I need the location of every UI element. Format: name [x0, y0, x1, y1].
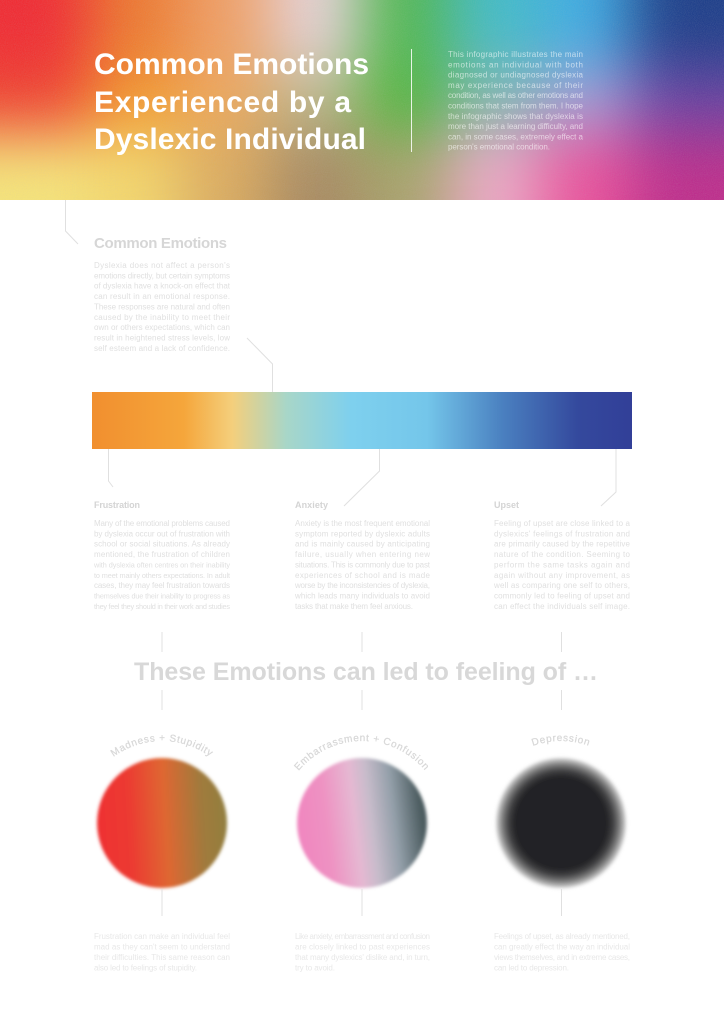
title: Common Emotions	[94, 48, 369, 81]
intro text: own or others expectations, which can	[94, 323, 230, 332]
depression text: Feelings of upset, as already mentioned,	[494, 932, 630, 941]
curved label: madness + stupidity: Madness + Stupidity	[110, 734, 213, 756]
embarrassment text	[295, 932, 430, 972]
curved label: embarrassment + confusion: Embarrassment + Confusion	[294, 734, 428, 770]
header intro text: more than just a learning difficulty, and	[448, 122, 583, 131]
upset text: dyslexics' feelings of frustration and	[494, 529, 630, 538]
anxiety text: situations. This is commonly due to past	[295, 560, 431, 569]
anxiety text: which leads many individuals to avoid	[294, 591, 430, 600]
anxiety text: tasks that make them feel anxious.	[295, 602, 413, 611]
intro text: of dyslexia have a knock-on effect that	[94, 282, 231, 291]
embarrassment text: that many dyslexics' dislike and, in turn,	[295, 953, 430, 962]
intro text: self esteem and a lack of confidence.	[94, 344, 230, 353]
anxiety text: and is mainly caused by anticipating	[295, 540, 430, 549]
header intro text	[448, 50, 584, 152]
upset text: again without any improvement, as	[494, 571, 630, 580]
anxiety text: failure, usually when entering new	[295, 550, 430, 559]
frustration text	[93, 519, 230, 611]
header intro text: emotions an individual with both	[448, 60, 583, 69]
connector: circle to text	[361, 889, 363, 916]
header divider	[410, 49, 412, 152]
panel: frustration	[93, 500, 230, 611]
upset text: nature of the condition. Seeming to	[494, 550, 631, 559]
connector: bar to upset	[601, 449, 616, 506]
anxiety text: Anxiety is the most frequent emotional	[295, 519, 430, 528]
upset text: can effect the individuals self image.	[494, 602, 630, 611]
intro text: These responses are natural and often	[94, 302, 230, 311]
madness text: mad as they can't seem to understand	[94, 942, 230, 952]
anxiety text: worse by the inconsistencies of dyslexia,	[294, 581, 430, 590]
intro text: emotions directly, but certain symptoms	[94, 271, 230, 280]
title: Experienced by a	[94, 86, 351, 119]
depression text: views themselves, and in extreme cases,	[494, 953, 630, 962]
anxiety text: symptom reported by dyslexic adults	[295, 529, 430, 538]
embarrassment text: try to avoid.	[295, 964, 335, 972]
header intro text: the infographic shows that dyslexia is	[448, 112, 583, 121]
header intro text: may experience because of their	[448, 81, 583, 90]
intro text: result in heightened stress levels, low	[94, 333, 230, 342]
header intro text: condition, as well as other emotions and	[448, 91, 583, 100]
panel: depression	[494, 735, 630, 972]
intro text: Dyslexia does not affect a person's	[94, 261, 230, 270]
depression text	[494, 932, 630, 972]
frustration text: cases, they may feel frustration towards	[94, 581, 230, 590]
upset text: perform the same tasks again and	[494, 560, 630, 569]
circle: pink to slate gradient	[297, 758, 427, 888]
madness text: also led to feelings of stupidity.	[94, 964, 197, 972]
anxiety text: experiences of school and is made	[295, 571, 431, 580]
header intro text: diagnosed or undiagnosed dyslexia	[448, 71, 584, 80]
intro text: can result in an emotional response.	[94, 292, 230, 301]
connector: circle to text	[161, 889, 163, 916]
connector lines below subheading	[162, 690, 562, 710]
madness text: Frustration can make an individual feel	[94, 932, 230, 941]
heading: common emotions: Common Emotions	[94, 235, 227, 252]
circle: dark soft-edged	[496, 758, 626, 888]
frustration text: they feel they should in their work and studies	[94, 602, 230, 611]
frustration text: to meet mainly others expectations. In adult	[94, 571, 230, 580]
header intro text: can, in some cases, extremely effect a	[448, 132, 584, 141]
connector: circle to text	[560, 889, 562, 916]
panel: rainbow header	[0, 0, 724, 200]
upset text: are primarily caused by the repetitive	[494, 540, 631, 549]
upset text: commonly led to feeling of upset and	[494, 591, 630, 600]
anxiety text	[294, 519, 431, 611]
frustration text: mentioned, the frustration of children	[94, 550, 230, 559]
depression text: can led to depression.	[494, 964, 569, 972]
heading: anxiety: Anxiety	[295, 500, 328, 510]
circle: red to olive gradient	[97, 758, 227, 888]
depression text: can greatly effect the way an individual	[494, 942, 630, 952]
title: Dyslexic Individual	[94, 123, 366, 156]
madness text	[94, 932, 230, 972]
frustration text: with dyslexia often centres on their inability	[93, 560, 230, 569]
heading: upset: Upset	[494, 500, 519, 510]
header intro text: person's emotional condition.	[448, 143, 550, 152]
header intro text: conditions that stem from them. I hope	[448, 102, 584, 110]
header gradient background	[0, 0, 724, 200]
frustration text: school or social situations. As already	[94, 540, 230, 549]
frustration text: by dyslexia occur out of frustration with	[94, 529, 230, 538]
connector lines above subheading	[162, 632, 562, 652]
upset text: well as comparing one self to others,	[493, 581, 630, 590]
header intro text: This infographic illustrates the main	[448, 50, 583, 59]
panel: anxiety	[294, 500, 431, 611]
heading: frustration: Frustration	[94, 500, 140, 510]
connector: intro to gradient bar	[247, 338, 272, 392]
connector: header to common emotions	[66, 200, 78, 244]
connector: bar to frustration	[108, 449, 113, 487]
embarrassment text: Like anxiety, embarrassment and confusion	[295, 932, 430, 941]
curved label: depression: Depression	[532, 735, 590, 746]
upset text: Feeling of upset are close linked to a	[494, 519, 631, 528]
intro text	[94, 261, 231, 353]
upset text	[493, 519, 631, 611]
embarrassment text: are closely linked to past experiences	[295, 942, 430, 952]
panel: embarrassment and confusion	[294, 734, 430, 972]
title	[94, 48, 369, 156]
gradient bar	[92, 392, 632, 449]
connector: bar to anxiety	[344, 449, 380, 506]
frustration text: themselves due their inability to progress as	[94, 591, 230, 600]
subheading: These Emotions can led to feeling of …	[134, 658, 598, 686]
intro text: caused by the inability to meet their	[94, 313, 230, 322]
panel: upset	[493, 500, 631, 611]
madness text: their difficulties. This same reason can	[94, 953, 230, 962]
frustration text: Many of the emotional problems caused	[94, 519, 230, 528]
panel: common emotions intro	[94, 235, 231, 353]
panel: madness and stupidity	[94, 734, 230, 972]
